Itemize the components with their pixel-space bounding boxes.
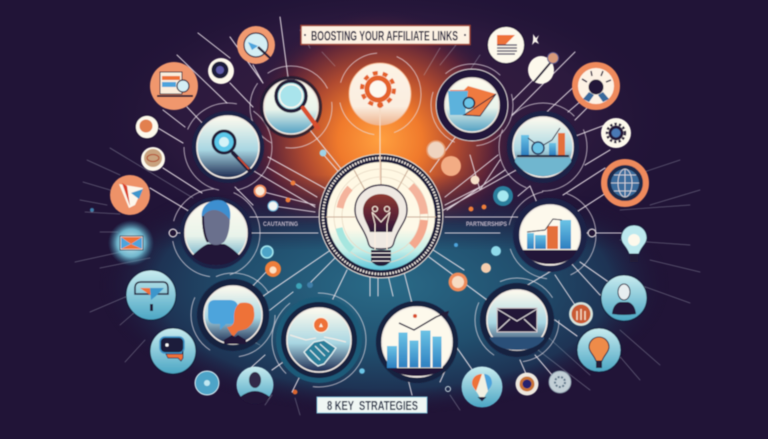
icon: laptop badge	[150, 62, 198, 110]
icon: fingerprint badge	[141, 147, 165, 171]
icon: purple dot badge	[208, 58, 234, 84]
icon: chat badge	[126, 270, 176, 320]
node: bar chart right	[513, 198, 587, 272]
icon: sparkle	[532, 34, 539, 45]
node: column chart bottom	[376, 301, 458, 383]
title banner: BOOSTING YOUR AFFILIATE LINKS	[311, 28, 458, 44]
faint outer rays	[75, 30, 700, 415]
icon: pin magnifier badge	[528, 52, 558, 84]
icon: blue dot badge	[195, 371, 219, 395]
connector lines	[150, 17, 625, 395]
bottom banner: 8 KEY STRATEGIES	[327, 398, 418, 413]
node: gear	[349, 63, 411, 180]
icon: globe badge	[604, 162, 646, 204]
icon: orange magnifier badge	[237, 26, 275, 64]
icon: document badge	[488, 26, 524, 64]
center band label: left: CAUTANTING	[263, 221, 298, 228]
node: envelope	[480, 283, 554, 357]
icon: award badge	[575, 65, 617, 107]
node: handshake	[276, 297, 362, 383]
center band label: right: PARTNERSHIPS	[466, 221, 508, 228]
node: person	[180, 197, 252, 269]
node: chart top right	[507, 111, 579, 183]
icon: small orange badge	[136, 116, 158, 138]
icon: lightbulb	[355, 185, 407, 266]
icon: avatar badge	[236, 366, 274, 404]
node: magnifier top left	[260, 76, 322, 138]
infographic canvas	[74, 13, 700, 416]
icon: orange bulb badge	[577, 328, 621, 372]
icon: business person badge	[601, 275, 647, 321]
icon: grey gear badge	[549, 371, 571, 393]
node: magnifier left	[192, 111, 264, 183]
title banner	[301, 26, 470, 44]
bottom banner	[317, 397, 427, 413]
small accent dots	[90, 141, 596, 394]
icon: balloon bulb badge	[462, 366, 502, 408]
icon: orange origami badge	[110, 175, 150, 215]
icon: lens badge	[516, 372, 538, 396]
node: folder	[436, 69, 508, 141]
central lightbulb hub	[319, 154, 443, 278]
icon: glowing envelope	[108, 220, 154, 266]
icon: speech badge	[150, 328, 196, 374]
icon: glowing bulb	[621, 225, 647, 262]
icon: orange bars badge	[569, 302, 593, 326]
orbit arcs around large nodes	[172, 53, 596, 387]
icon: gear badge	[601, 118, 631, 148]
node: speech bubbles	[197, 279, 269, 351]
